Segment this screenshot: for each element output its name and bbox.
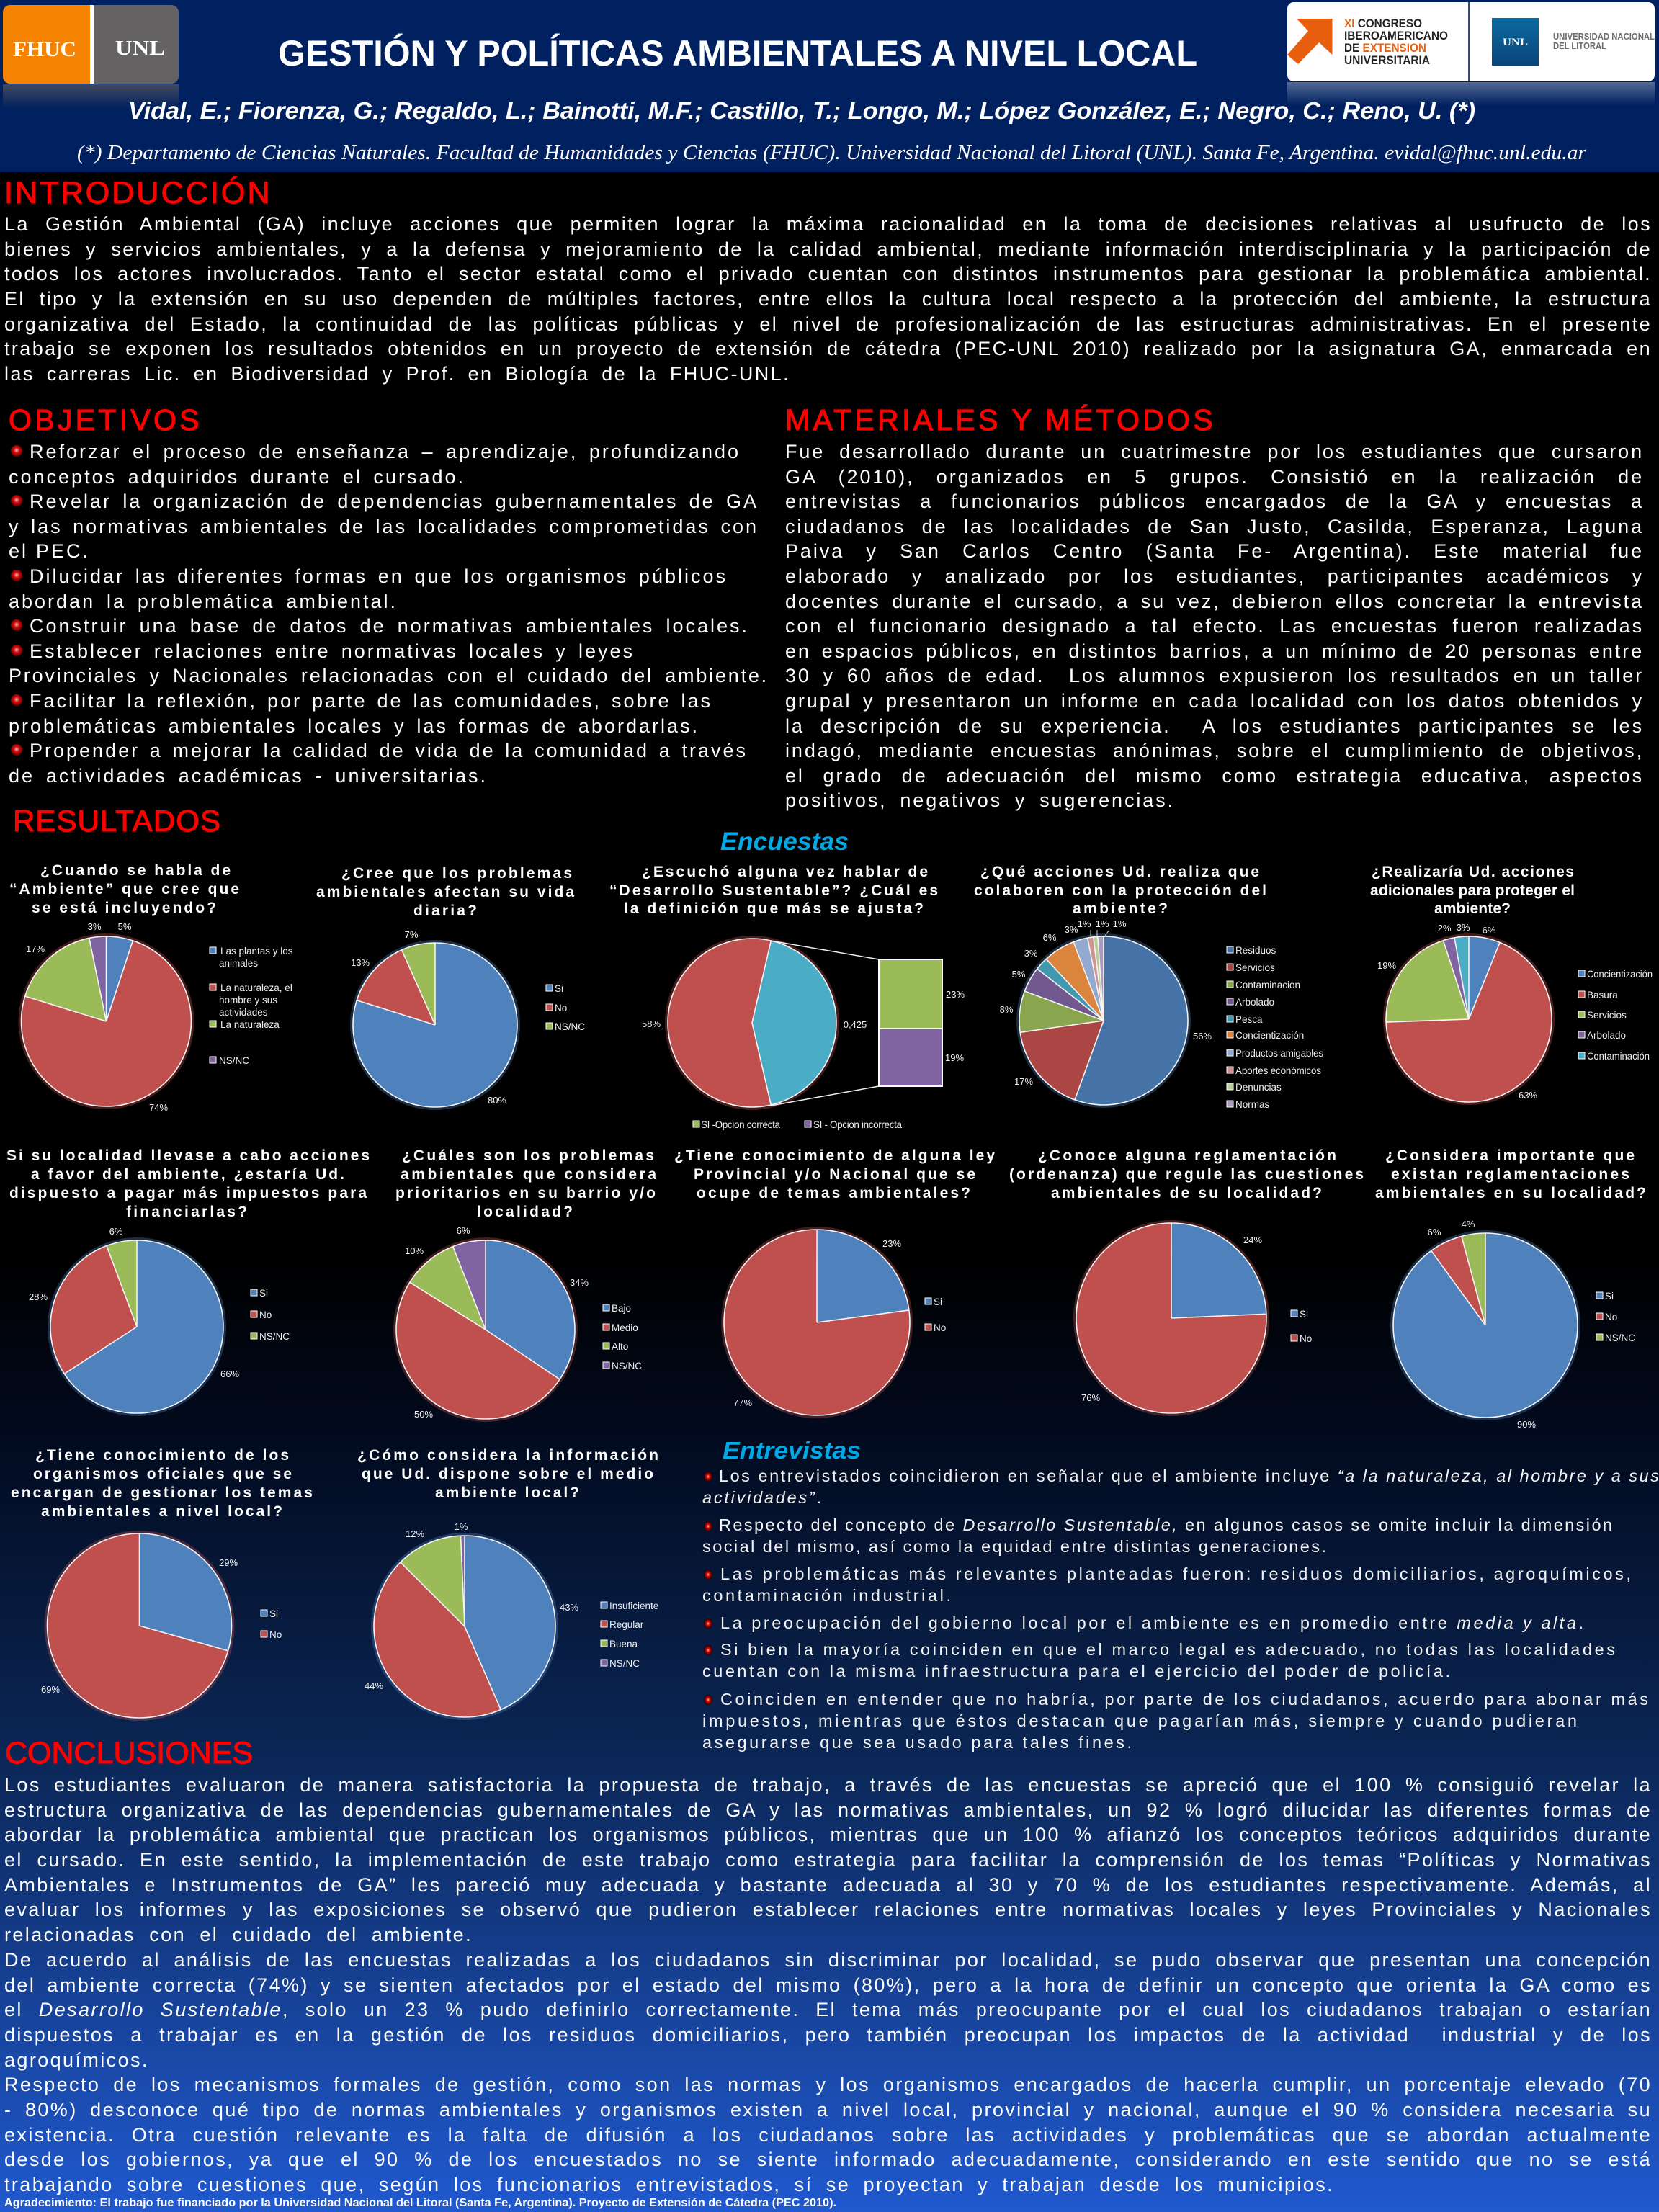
chart: ambiente	[9, 862, 293, 1113]
legend	[251, 1288, 290, 1342]
data labels	[733, 1238, 901, 1408]
data labels: 6%	[1043, 932, 1057, 943]
legend: Productos amigables	[1235, 1048, 1323, 1059]
introduction text: trabajo se exponen los resultados obtenidos en un proyecto de extensión de cátedra (PEC-UNL 2010) realizado por la asignatura GA, enmarcada en	[4, 338, 1652, 359]
methods text: GA (2010), organizados en 5 grupos. Consistió en la realización de	[785, 466, 1644, 488]
legend: Contaminación	[1587, 1051, 1650, 1062]
question text: ambiente?	[1434, 900, 1511, 917]
interview findings: actividades”.	[702, 1488, 821, 1507]
introduction text: todos los actores involucrados. Tanto el sector estatal como el privado cuentan con distintos instrumentos para gestionar la problemática ambiental.	[4, 263, 1652, 285]
legend: actividades	[219, 1007, 268, 1018]
authors: Vidal, E.; Fiorenza, G.; Regaldo, L.; Bainotti, M.F.; Castillo, T.; Longo, M.; López González, E.; Negro, C.; Reno, U. (*)	[128, 97, 1475, 124]
objectives list: el PEC.	[9, 540, 90, 562]
data labels: 69%	[41, 1684, 60, 1695]
data labels: 29%	[219, 1557, 238, 1568]
legend	[1596, 1291, 1635, 1343]
data labels: 6%	[1483, 925, 1496, 936]
interview findings: Respecto del concepto de Desarrollo Sustentable, en algunos casos se omite incluir la dimensión	[719, 1515, 1612, 1534]
logo: FHUC UNL	[3, 5, 179, 109]
panel: introducción	[4, 176, 1652, 385]
methods text: elaborado y analizado por los estudiantes, participantes académicos y	[785, 565, 1644, 587]
data labels: 8%	[1000, 1004, 1014, 1015]
objectives list: Propender a mejorar la calidad de vida de la comunidad a través	[30, 740, 748, 761]
legend: NS/NC	[609, 1658, 640, 1669]
chart: reglamentación	[1009, 1147, 1364, 1415]
legend	[603, 1303, 642, 1371]
methods text: con el funcionario designado a tal efecto. Las encuestas fueron realizadas	[785, 615, 1644, 637]
question text	[1370, 864, 1575, 917]
question text: organismos oficiales que se	[33, 1466, 292, 1482]
methods text: la descripción de su experiencia. A los estudiantes participantes se les	[785, 715, 1644, 737]
legend: Bajo	[612, 1303, 631, 1314]
question text: se está incluyendo?	[32, 900, 216, 916]
data labels	[1377, 922, 1537, 1101]
legend: Si	[934, 1297, 942, 1307]
pie	[46, 1532, 233, 1719]
legend	[210, 946, 293, 1066]
conclusions text: relacionadas con el cuidado del ambiente.	[4, 1924, 473, 1945]
legend: hombre y sus	[219, 995, 277, 1006]
question text: “Desarrollo Sustentable”? ¿Cuál es	[609, 882, 938, 899]
objectives list: y las normativas ambientales de las localidades comprometidas con	[9, 516, 759, 537]
data labels	[26, 921, 168, 1113]
question text: (ordenanza) que regule las cuestiones	[1009, 1166, 1364, 1183]
question text: ambientales de su localidad?	[1051, 1185, 1322, 1201]
logo: congreso and UNL: UNIVERSITARIA	[1344, 53, 1430, 67]
data labels: 24%	[1243, 1235, 1262, 1245]
chart: información ambiental	[357, 1447, 658, 1719]
breakdown bar	[771, 941, 942, 1106]
question text	[357, 1447, 658, 1501]
question text: ambiente?	[1073, 900, 1168, 917]
affiliation: (*) Departamento de Ciencias Naturales. Facultad de Humanidades y Ciencias (FHUC). Universidad Nacional del Litoral (UNL). Santa Fe, Argentina. evidal@fhuc.unl.edu.ar	[77, 142, 1586, 164]
panel: objetivos	[9, 403, 769, 787]
methods text: Paiva y San Carlos Centro (Santa Fe- Argentina). Este material fue	[785, 540, 1644, 562]
heading: entrevistas: Entrevistas	[723, 1437, 861, 1464]
interview findings: contaminación industrial.	[702, 1586, 951, 1605]
data labels	[405, 1225, 589, 1420]
conclusions text: Ambientales e Instrumentos de GA” les pareció muy adecuada y bastante adecuada al 30 y 70 % de los estudiantes respectivamente. Además, al	[4, 1874, 1652, 1896]
heading: conclusiones: CONCLUSIONES	[5, 1736, 253, 1770]
data labels: 12%	[406, 1528, 424, 1539]
interview findings: Los entrevistados coincidieron en señalar que el ambiente incluye “a la naturaleza, al hombre y a sus	[719, 1467, 1659, 1485]
data labels	[29, 1226, 239, 1379]
objectives list: abordan la problemática ambiental.	[9, 591, 398, 612]
question text: ¿Tiene conocimiento de los	[35, 1447, 289, 1464]
methods text: en espacios públicos, en distintos barrios, a un mínimo de 20 personas entre	[785, 640, 1644, 662]
question text: ¿Tiene conocimiento de alguna ley	[674, 1147, 995, 1164]
legend: No	[555, 1003, 567, 1013]
methods text: grupal y presentaron un informe en cada localidad con los datos obtenidos y	[785, 690, 1644, 712]
logo: congreso and UNL: IBEROAMERICANO	[1344, 29, 1448, 42]
question text: ambientales afectan su vida	[316, 884, 574, 900]
pie	[723, 1228, 911, 1417]
data labels: 80%	[488, 1095, 506, 1106]
legend	[546, 983, 585, 1032]
pie of pie	[666, 937, 838, 1109]
question text: que Ud. dispone sobre el medio	[362, 1466, 653, 1482]
chart: vida diaria	[316, 865, 585, 1109]
data labels: 34%	[570, 1277, 589, 1288]
question text: ambiente local?	[435, 1485, 579, 1501]
question text	[1375, 1147, 1646, 1201]
data labels: 7%	[405, 929, 419, 940]
legend	[261, 1608, 282, 1640]
question text: dispuesto a pagar más impuestos para	[9, 1185, 367, 1201]
chart: problemas prioritarios	[395, 1147, 656, 1420]
logo: congreso and UNL: DE EXTENSION	[1344, 41, 1426, 55]
conclusions text: trabajando sobre cuestiones que, según los funcionarios entrevistados, sí se proyectan y trabajan desde los municipios.	[4, 2174, 1334, 2195]
question text: ambientales en su localidad?	[1375, 1185, 1646, 1201]
data labels: 74%	[149, 1102, 168, 1113]
question text: ambientales a nivel local?	[41, 1503, 282, 1520]
question text	[316, 865, 574, 919]
question text: ¿Considera importante que	[1385, 1147, 1635, 1164]
pie	[395, 1239, 576, 1420]
data labels: 3%	[88, 921, 102, 932]
logo: congreso and UNL: UNL	[1503, 37, 1528, 48]
legend: Arbolado	[1235, 997, 1274, 1008]
methods text: entrevistas a funcionarios públicos encargados de la GA y encuestas a	[785, 491, 1644, 512]
legend: NS/NC	[612, 1361, 642, 1371]
panel: entrevistas	[702, 1437, 1659, 1752]
data labels: 3%	[1065, 924, 1078, 935]
legend: Arbolado	[1587, 1030, 1626, 1041]
legend: Si	[1300, 1309, 1308, 1320]
introduction text: organizativa del Estado, la continuidad de las políticas públicas y el nivel de profesionalización de las estructuras administrativas. En el presente	[4, 313, 1652, 335]
legend: Concientización	[1235, 1030, 1304, 1041]
conclusions text: estructura organizativa de las dependencias gubernamentales de GA y las normativas ambientales, un 92 % logró dilucidar las diferentes formas de	[4, 1799, 1652, 1821]
data labels: 5%	[1012, 969, 1026, 980]
conclusions text: dispuestos a trabajar es en la gestión de los residuos domiciliarios, pero también preocupan los impactos de la actividad industrial y de los	[4, 2024, 1652, 2046]
data labels: 28%	[29, 1291, 48, 1302]
methods text: positivos, negativos y sugerencias.	[785, 789, 1175, 811]
legend: Si	[259, 1288, 268, 1299]
question text: colaboren con la protección del	[974, 882, 1266, 899]
conclusions text: abordar la problemática ambiental que practican los organismos públicos, mientras que un 100 % afianzó los conceptos teóricos adquiridos durante	[4, 1824, 1652, 1845]
data labels: 13%	[351, 957, 370, 968]
objectives list: Dilucidar las diferentes formas en que los organismos públicos	[30, 565, 728, 587]
legend: No	[1605, 1312, 1617, 1322]
chart: importancia reglamentaciones	[1375, 1147, 1646, 1430]
question text: ¿Conoce alguna reglamentación	[1038, 1147, 1336, 1164]
conclusions text: - 80%) desconoce qué tipo de normas ambientales y organismos existen a nivel local, provincial y nacional, aunque el 90 % considera necesaria su	[4, 2099, 1652, 2121]
objectives list: conceptos adquiridos durante el cursado.	[9, 466, 465, 488]
objectives list: Revelar la organización de dependencias gubernamentales de GA	[30, 491, 759, 512]
objectives list: Establecer relaciones entre normativas locales y leyes	[30, 640, 635, 662]
introduction text: bienes y servicios ambientales, y a la defensa y mejoramiento de la calidad ambiental, mediante información interdisciplinaria y la participación de	[4, 238, 1652, 260]
legend: SI - Opcion incorrecta	[813, 1119, 902, 1130]
heading: objetivos: OBJETIVOS	[9, 403, 202, 436]
legend	[693, 1119, 902, 1130]
legend: NS/NC	[219, 1055, 249, 1066]
question text: Si su localidad llevase a cabo acciones	[6, 1147, 370, 1164]
legend: Alto	[612, 1341, 628, 1352]
legend	[1227, 945, 1323, 1110]
question text: ¿Cree que los problemas	[341, 865, 572, 882]
question text: ¿Cómo considera la información	[357, 1447, 658, 1464]
legend	[1578, 969, 1653, 1062]
data labels: 90%	[1517, 1419, 1536, 1430]
legend: SI -Opcion correcta	[701, 1119, 780, 1130]
pie	[1075, 1222, 1268, 1415]
question text: ¿Qué acciones Ud. realiza que	[980, 864, 1259, 880]
question text	[9, 862, 239, 916]
data labels	[1000, 918, 1212, 1087]
data labels: 1%	[1078, 918, 1091, 929]
data labels: 23%	[946, 989, 965, 1000]
question text: “Ambiente” que cree que	[9, 881, 239, 897]
legend: Normas	[1235, 1099, 1270, 1110]
conclusions text: De acuerdo al análisis de las encuestas realizadas a los ciudadanos sin discriminar por localidad, se pudo observar que presentan una concepción	[4, 1949, 1652, 1971]
objectives list: problemáticas ambientales locales y las formas de abordarlas.	[9, 715, 699, 737]
legend	[925, 1297, 946, 1333]
legend	[601, 1600, 658, 1669]
legend: Contaminacion	[1235, 980, 1300, 990]
legend: Denuncias	[1235, 1082, 1282, 1093]
question text: ¿Cuando se habla de	[40, 862, 231, 879]
interview findings: La preocupación del gobierno local por el ambiente es en promedio entre media y alta.	[720, 1613, 1583, 1632]
question text: ¿Escuchó alguna vez hablar de	[642, 864, 928, 880]
data labels: 6%	[1428, 1227, 1441, 1237]
interview findings: Las problemáticas más relevantes planteadas fueron: residuos domiciliarios, agroquímicos,	[720, 1564, 1631, 1583]
legend: No	[259, 1309, 272, 1320]
data labels: 17%	[1014, 1076, 1033, 1087]
pie	[1392, 1232, 1579, 1419]
methods text: el grado de adecuación del mismo como estrategia educativa, aspectos	[785, 765, 1644, 787]
legend	[1291, 1309, 1312, 1344]
conclusions text: el Desarrollo Sustentable, solo un 23 % pudo definirlo correctamente. El tema más preocupante por el cual los ciudadanos trabajan o estarían	[4, 1999, 1652, 2020]
methods text	[785, 441, 1644, 811]
data labels: 19%	[1377, 960, 1396, 971]
title: GESTIÓN Y POLÍTICAS AMBIENTALES A NIVEL LOCAL	[278, 33, 1197, 73]
data labels	[351, 929, 506, 1106]
data labels: 56%	[1193, 1031, 1212, 1042]
logo: congreso and UNL: XI CONGRESO	[1344, 17, 1422, 30]
question text: financiarlas?	[126, 1204, 247, 1220]
data labels	[1081, 1235, 1262, 1403]
data labels	[41, 1557, 238, 1695]
legend: No	[934, 1322, 946, 1333]
conclusions text: Respecto de los mecanismos formales de gestión, como son las normas y los organismos encargados de hacerla cumplir, un porcentaje elevado (70	[4, 2074, 1652, 2095]
conclusions text: agroquímicos.	[4, 2049, 149, 2071]
data labels: 3%	[1457, 922, 1470, 933]
legend: Si	[555, 983, 563, 994]
question text: ¿Cuáles son los problemas	[402, 1147, 654, 1164]
objectives list	[9, 441, 769, 787]
logo: FHUC UNL: FHUC	[13, 37, 76, 61]
question text	[609, 864, 938, 917]
data labels	[642, 989, 965, 1063]
data labels: 44%	[365, 1680, 383, 1691]
question text	[11, 1447, 313, 1520]
conclusions text: existencia. Otra cuestión relevante es la falta de difusión a los ciudadanos sobre las actividades y problemáticas que se abordan actualmente	[4, 2124, 1652, 2146]
objectives list: Construir una base de datos de normativas ambientales locales.	[30, 615, 749, 637]
data labels: 76%	[1081, 1392, 1100, 1403]
data labels: 43%	[560, 1602, 578, 1613]
legend: Las plantas y los	[220, 946, 293, 957]
legend: Basura	[1587, 990, 1618, 1000]
heading: introducción: INTRODUCCIÓN	[4, 176, 272, 210]
pie	[1018, 935, 1189, 1106]
panel: materiales y métodos	[785, 403, 1644, 811]
legend: Residuos	[1235, 945, 1276, 956]
data labels: 1%	[455, 1521, 468, 1532]
legend: NS/NC	[555, 1021, 585, 1032]
chart: acciones adicionales	[1370, 864, 1653, 1103]
panel: conclusiones	[4, 1736, 1652, 2195]
interview findings: cuentan con la misma infraestructura para el ejercicio del poder de policía.	[702, 1662, 1450, 1680]
legend: Si	[269, 1608, 278, 1619]
question text	[674, 1147, 995, 1201]
question text: la definición que más se ajusta?	[624, 900, 924, 917]
conclusions text: evaluar los informes y las exposiciones se observó que pudieron establecer relaciones entre normativas locales y leyes Provinciales y Nacionales	[4, 1899, 1652, 1920]
data labels: 58%	[642, 1018, 661, 1029]
conclusions text	[4, 1774, 1652, 2195]
introduction text: las carreras Lic. en Biodiversidad y Prof. en Biología de la FHUC-UNL.	[4, 363, 790, 385]
data labels: 4%	[1462, 1219, 1475, 1230]
chart: impuestos	[6, 1147, 370, 1415]
chart: acciones	[974, 864, 1323, 1110]
objectives list: Reforzar el proceso de enseñanza – aprendizaje, profundizando	[30, 441, 741, 462]
introduction text: El tipo y la extensión en su uso dependen de múltiples factores, entre ellos la cultura local respecto a la protección del ambiente, la estructura	[4, 288, 1652, 310]
legend: Si	[1605, 1291, 1614, 1302]
question text: existan reglamentaciones	[1391, 1166, 1629, 1183]
question text	[974, 864, 1266, 917]
legend: No	[1300, 1333, 1312, 1344]
acknowledgement: Agradecimiento: El trabajo fue financiado por la Universidad Nacional del Litoral (Santa Fe, Argentina). Proyecto de Extensión de Cátedra (PEC 2010).	[4, 2197, 836, 2209]
interview findings	[702, 1467, 1659, 1752]
conclusions text: el cursado. En este sentido, la implementación de este trabajo como estrategia para facilitar la comprensión de los temas “Políticas y Normativas	[4, 1849, 1652, 1871]
interview findings: Si bien la mayoría coinciden en que el marco legal es adecuado, no todas las localidades	[720, 1640, 1615, 1659]
data labels: 6%	[457, 1225, 470, 1236]
data labels	[1428, 1219, 1536, 1430]
data labels: 50%	[414, 1409, 433, 1420]
data labels: 2%	[1438, 923, 1452, 933]
chart: organismos oficiales	[11, 1447, 313, 1719]
legend: No	[269, 1629, 282, 1640]
legend: Servicios	[1587, 1010, 1627, 1021]
methods text: indagó, mediante encuestas anónimas, sobre el cumplimiento de objetivos,	[785, 740, 1644, 761]
data labels	[365, 1521, 578, 1691]
legend: Insuficiente	[609, 1600, 658, 1611]
pie	[352, 941, 519, 1109]
heading: resultados: RESULTADOS	[13, 804, 220, 838]
objectives list: de actividades académicas - universitarias.	[9, 765, 488, 787]
data labels: 1%	[1096, 918, 1109, 929]
introduction text: La Gestión Ambiental (GA) incluye acciones que permiten lograr la máxima racionalidad en la toma de decisiones relativas al usufructo de los	[4, 213, 1652, 235]
data labels: 1%	[1113, 918, 1127, 929]
question text: a favor del ambiente, ¿estaría Ud.	[31, 1166, 344, 1183]
legend: Buena	[609, 1639, 638, 1649]
interview findings: impuestos, mientras que éstos destacan que pagarían más, siempre y cuando pudieran	[702, 1711, 1577, 1730]
data labels: 63%	[1519, 1090, 1537, 1101]
methods text: docentes durante el cursado, a su vez, debieron ellos concretar la entrevista	[785, 591, 1644, 612]
logo: FHUC UNL: UNL	[115, 37, 165, 60]
conclusions text: Los estudiantes evaluaron de manera satisfactoria la propuesta de trabajo, a través de las encuestas se apreció que el 100 % consiguió revelar la	[4, 1774, 1652, 1796]
data labels: 3%	[1024, 948, 1038, 959]
pie	[1385, 935, 1553, 1103]
interview findings: asegurarse que sea usado para tales fines.	[702, 1733, 1132, 1752]
data labels: 10%	[405, 1245, 424, 1256]
question text: ¿Realizaría Ud. acciones	[1372, 864, 1574, 880]
question text: ocupe de temas ambientales?	[697, 1185, 970, 1201]
chart: desarrollo sustentable	[609, 864, 965, 1130]
question text: adicionales para proteger el	[1370, 882, 1575, 899]
question text	[395, 1147, 656, 1220]
question text: prioritarios en su barrio y/o	[395, 1185, 656, 1201]
pie	[372, 1534, 557, 1719]
data labels: 0,425	[844, 1019, 867, 1030]
conclusions text: del ambiente correcta (74%) y se sienten afectados por el estado del mismo (80%), pero a la hora de definir un concepto que orienta la GA como es	[4, 1974, 1652, 1996]
question text: Provincial y/o Nacional que se	[694, 1166, 975, 1183]
heading: encuestas: Encuestas	[720, 828, 849, 856]
legend: La naturaleza, el	[220, 982, 292, 993]
methods text: ciudadanos de las localidades de San Justo, Casilda, Esperanza, Laguna	[785, 516, 1644, 537]
objectives list: Provinciales y Nacionales relacionadas con el cuidado del ambiente.	[9, 665, 769, 686]
legend: Servicios	[1235, 962, 1275, 973]
conclusions text: desde los gobiernos, ya que el 90 % de los encuestados no se siente informado adecuadamente, considerando en este sentido que no se está	[4, 2149, 1652, 2170]
objectives list: Facilitar la reflexión, por parte de las comunidades, sobre las	[30, 690, 712, 712]
legend: Regular	[609, 1619, 644, 1630]
question text: diaria?	[413, 903, 477, 919]
logo: congreso and UNL: DEL LITORAL	[1553, 40, 1606, 51]
data labels: 6%	[109, 1226, 123, 1237]
data labels: 66%	[220, 1369, 239, 1379]
question text: ambientales que considera	[401, 1166, 656, 1183]
question text: localidad?	[477, 1204, 573, 1220]
data labels: 5%	[118, 921, 132, 932]
question text	[1009, 1147, 1364, 1201]
pie	[49, 1239, 225, 1415]
methods text: Fue desarrollado durante un cuatrimestre por los estudiantes que cursaron	[785, 441, 1644, 462]
data labels: 77%	[733, 1397, 752, 1408]
pie	[20, 935, 193, 1108]
question text: encargan de gestionar los temas	[11, 1485, 313, 1501]
chart: ley provincial	[674, 1147, 995, 1417]
legend: NS/NC	[259, 1331, 290, 1342]
legend: Aportes económicos	[1235, 1065, 1321, 1076]
interview findings: social del mismo, así como la equidad entre distintas generaciones.	[702, 1537, 1326, 1556]
data labels: 17%	[26, 944, 45, 954]
methods text: 30 y 60 años de edad. Los alumnos expusieron los resultados en un taller	[785, 665, 1644, 686]
legend: Pesca	[1235, 1014, 1263, 1025]
logo: congreso and UNL	[1287, 2, 1655, 105]
legend: Medio	[612, 1322, 638, 1333]
legend: Concientización	[1587, 969, 1653, 980]
header band	[0, 0, 1659, 172]
legend: La naturaleza	[220, 1019, 280, 1030]
data labels: 23%	[882, 1238, 901, 1249]
interview findings: Coinciden en entender que no habría, por parte de los ciudadanos, acuerdo para abonar más	[720, 1690, 1648, 1709]
legend: NS/NC	[1605, 1333, 1635, 1343]
question text	[6, 1147, 370, 1220]
introduction text	[4, 213, 1652, 385]
heading: materiales y métodos: MATERIALES Y MÉTODOS	[785, 403, 1216, 436]
data labels: 19%	[945, 1052, 964, 1063]
legend: animales	[219, 958, 258, 969]
